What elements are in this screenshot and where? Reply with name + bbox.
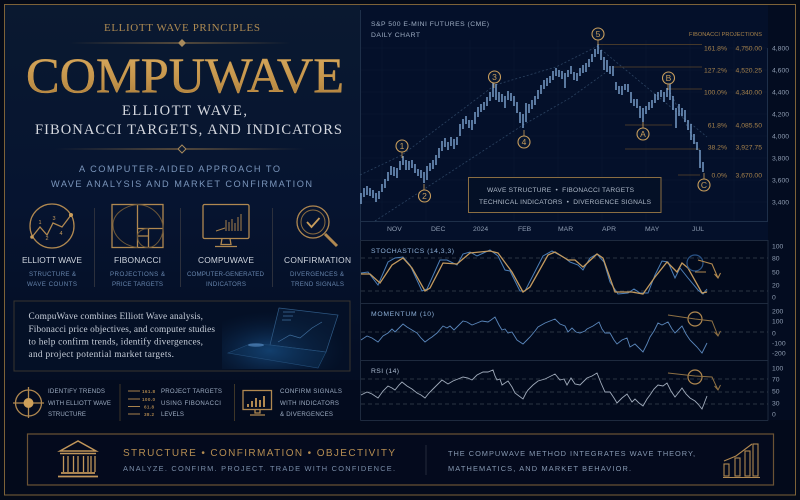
channel lines <box>360 46 707 221</box>
icon: rising bars <box>723 444 760 478</box>
axis labels: 0 <box>772 412 776 418</box>
fibonacci lines <box>598 44 702 175</box>
fibonacci projections table: 4,085.50 <box>736 122 762 130</box>
feature text: CONFIRM SIGNALS <box>280 388 342 395</box>
icon: golden spiral <box>112 204 163 248</box>
axis labels: 0 <box>772 330 776 338</box>
icon: fibonacci levels: 100.0 <box>142 397 155 402</box>
body text <box>28 312 215 360</box>
axis labels: 70 <box>772 376 780 384</box>
feature text: WITH ELLIOTT WAVE <box>48 400 111 407</box>
time axis labels <box>387 226 704 233</box>
heading: MOMENTUM (10) <box>371 311 434 318</box>
axis labels: 100 <box>772 366 784 372</box>
description: STRUCTURE & <box>29 271 77 278</box>
banner statement: THE COMPUWAVE METHOD INTEGRATES WAVE THEORY, <box>448 449 695 458</box>
price axis labels <box>772 46 789 206</box>
title: COMPUWAVE <box>26 47 344 103</box>
axes <box>360 10 768 240</box>
panel: fibonacci pillar <box>110 204 166 288</box>
feature: confirm signals <box>243 388 342 418</box>
description <box>110 271 166 288</box>
blue %K line <box>361 250 707 294</box>
divergence callout <box>687 255 720 278</box>
axis labels <box>772 366 784 418</box>
panel: bottom banner <box>28 434 774 485</box>
feature text: PROJECT TARGETS <box>161 388 222 395</box>
icon: monitor chart <box>203 204 249 246</box>
banner statement: MATHEMATICS, AND MARKET BEHAVIOR. <box>448 464 631 473</box>
axis labels: 0 <box>772 294 776 302</box>
fibonacci projections table: 3,670.00 <box>736 172 762 180</box>
feature text: WITH INDICATORS <box>280 400 339 407</box>
fibonacci projections table <box>689 32 762 180</box>
icon: wave circle: 1 <box>38 220 42 226</box>
feature: identify trends <box>13 387 111 418</box>
rsi line <box>361 370 707 409</box>
divergence callout <box>668 370 720 390</box>
wave markers: 5 <box>596 29 601 39</box>
fibonacci projections table: 100.0% <box>704 90 727 96</box>
panel: rsi <box>361 366 784 418</box>
time axis labels: MAR <box>558 226 573 233</box>
icon: wave circle: 3 <box>52 216 56 222</box>
fibonacci projections table: 161.8% <box>704 46 727 52</box>
axis labels: 30 <box>772 400 780 408</box>
feature text: STRUCTURE <box>48 411 86 418</box>
icon: fibonacci levels: 61.8 <box>144 404 154 410</box>
left header block <box>26 22 344 189</box>
time axis labels: 2024 <box>473 226 488 233</box>
icon: temple <box>58 441 98 476</box>
heading: STOCHASTICS (14,3,3) <box>371 248 454 255</box>
feature text: IDENTIFY TRENDS <box>48 388 105 395</box>
momentum line <box>361 317 707 353</box>
feature text <box>161 388 222 418</box>
icon: wave circle <box>30 204 74 248</box>
description: PRICE TARGETS <box>112 281 163 288</box>
wave markers: 4 <box>522 137 527 147</box>
icon: fibonacci levels: 38.2 <box>144 412 154 417</box>
icon: wave circle: 4 <box>59 231 63 237</box>
icon: wave circle: 2 <box>45 236 49 242</box>
legend box <box>468 178 661 212</box>
subtitle: FIBONACCI TARGETS, AND INDICATORS <box>35 122 342 138</box>
feature text: & DIVERGENCES <box>280 411 333 418</box>
description <box>290 271 345 288</box>
label: FIBONACCI <box>114 255 161 265</box>
fibonacci projections table: FIBONACCI PROJECTIONS <box>689 32 762 38</box>
time axis labels: DEC <box>431 226 445 233</box>
axis labels: 80 <box>772 256 780 262</box>
time axis labels: JUL <box>692 226 704 233</box>
fibonacci projections table: 4,520.25 <box>736 68 762 74</box>
banner heading: STRUCTURE • CONFIRMATION • OBJECTIVITY <box>123 448 395 459</box>
axis labels: 100 <box>772 244 784 250</box>
subtitle: ELLIOTT WAVE, <box>122 103 247 119</box>
panel: main price chart <box>360 10 789 240</box>
panel frame lines <box>360 240 768 420</box>
banner statement <box>448 449 695 473</box>
price axis labels: 4,800 <box>772 46 789 52</box>
orange %D line <box>361 251 707 294</box>
axis labels: 50 <box>772 388 780 396</box>
price axis labels: 4,200 <box>772 112 789 118</box>
icon: magnifier check <box>297 206 337 246</box>
wave markers: 1 <box>400 141 405 151</box>
tagline <box>51 164 312 189</box>
fibonacci projections table: 4,340.00 <box>736 90 762 96</box>
fibonacci projections table: 3,927.75 <box>736 144 762 152</box>
description <box>27 271 77 288</box>
grid <box>361 40 767 221</box>
divergence callout <box>668 312 720 336</box>
icon: small monitor <box>243 390 272 415</box>
description: WAVE COUNTS <box>27 281 77 288</box>
price axis labels: 3,400 <box>772 200 789 206</box>
time axis labels: FEB <box>518 226 532 233</box>
wave markers: A <box>640 129 646 139</box>
panel: stochastics <box>361 244 784 302</box>
price axis labels: 4,400 <box>772 90 789 96</box>
description <box>187 271 265 288</box>
wave markers <box>396 28 710 202</box>
price axis labels: 3,600 <box>772 178 789 184</box>
feature text <box>48 388 111 418</box>
legend box: WAVE STRUCTURE • FIBONACCI TARGETS <box>487 187 635 194</box>
feature text: LEVELS <box>161 411 184 418</box>
axis labels <box>772 244 784 302</box>
axis labels <box>772 308 786 358</box>
icon: fibonacci levels <box>128 389 155 417</box>
fibonacci projections table: 127.2% <box>704 68 727 74</box>
price axis labels: 3,800 <box>772 156 789 162</box>
kicker heading: ELLIOTT WAVE PRINCIPLES <box>104 22 260 34</box>
panel: compuwave description <box>14 301 350 371</box>
pillar separators <box>94 208 272 287</box>
description: DIVERGENCES & <box>290 271 345 278</box>
body text: to help confirm trends, identify divergences, <box>28 336 203 348</box>
description: PROJECTIONS & <box>110 271 166 278</box>
fibonacci projections table: 0.0% <box>712 172 727 180</box>
panel: confirmation pillar <box>284 206 351 288</box>
wave markers: B <box>666 73 672 83</box>
feature text: USING FIBONACCI <box>161 400 221 407</box>
axis labels: -100 <box>772 340 786 348</box>
panel: compuwave pillar <box>187 204 265 288</box>
legend box: TECHNICAL INDICATORS • DIVERGENCE SIGNALS <box>479 199 652 206</box>
panel: momentum <box>361 308 786 358</box>
illustration: laptop <box>222 303 348 369</box>
panel: elliott wave pillar <box>22 204 82 288</box>
label: COMPUWAVE <box>198 255 254 265</box>
label: CONFIRMATION <box>284 255 351 265</box>
axis labels: 50 <box>772 270 780 276</box>
axis labels: 100 <box>772 318 784 326</box>
chart title <box>371 21 489 39</box>
axis labels: 200 <box>772 308 784 316</box>
subtitle <box>35 103 342 138</box>
banner tagline: ANALYZE. CONFIRM. PROJECT. TRADE WITH CONFIDENCE. <box>123 464 395 473</box>
price axis labels: 4,600 <box>772 68 789 74</box>
candlesticks <box>361 44 703 204</box>
chart title: S&P 500 E-MINI FUTURES (CME) <box>371 21 489 28</box>
feature: project targets <box>128 388 222 418</box>
fibonacci projections table: 4,750.00 <box>736 46 762 52</box>
description: COMPUTER-GENERATED <box>187 271 265 278</box>
body text: Fibonacci price objectives, and computer studies <box>28 325 215 335</box>
price axis labels: 4,000 <box>772 134 789 140</box>
time axis labels: APR <box>602 226 616 233</box>
feature text <box>280 388 342 418</box>
time axis labels: NOV <box>387 226 402 233</box>
body text: CompuWave combines Elliott Wave analysis, <box>28 312 203 322</box>
chart title: DAILY CHART <box>371 32 420 39</box>
tagline: WAVE ANALYSIS AND MARKET CONFIRMATION <box>51 179 312 189</box>
heading: RSI (14) <box>371 368 399 375</box>
icon: crosshair <box>13 387 44 418</box>
label: ELLIOTT WAVE <box>22 255 82 265</box>
wave markers: 3 <box>492 72 497 82</box>
description: TREND SIGNALS <box>291 281 344 288</box>
tagline: A COMPUTER-AIDED APPROACH TO <box>79 164 280 174</box>
body text: and project potential market targets. <box>28 350 174 360</box>
fibonacci projections table: 38.2% <box>708 144 727 152</box>
wave markers: C <box>701 180 707 190</box>
axis labels: 20 <box>772 282 780 290</box>
wave markers: 2 <box>422 191 427 201</box>
icon: fibonacci levels: 161.8 <box>142 389 155 394</box>
axis labels: -200 <box>772 350 786 358</box>
fibonacci projections table: 61.8% <box>708 122 727 130</box>
time axis labels: MAY <box>645 226 660 233</box>
description: INDICATORS <box>206 281 246 288</box>
